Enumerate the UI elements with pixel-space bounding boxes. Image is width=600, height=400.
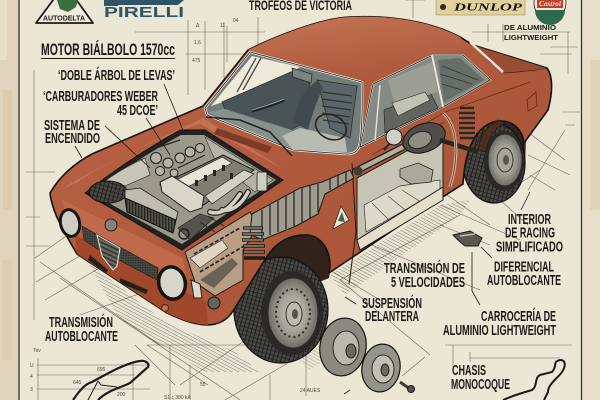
label: transmision 5 velocidades <box>384 259 465 291</box>
leader lines <box>75 84 530 394</box>
label: chasis <box>451 363 510 393</box>
label: interior: DE RACING <box>505 226 555 242</box>
small blueprint annotations: 04 <box>233 18 239 24</box>
label: motor heading: MOTOR BIÁLBOLO 1570cc <box>41 40 175 59</box>
label: carburadores: ‘CARBURADORES WEBER <box>43 89 158 105</box>
label: encendido: SISTEMA DE <box>44 118 100 134</box>
label: transmision 5 velocidades: 5 VELOCIDADES <box>391 275 465 291</box>
label: carroceria: CARROCERÍA DE <box>481 308 556 325</box>
cylinder head <box>160 155 254 206</box>
carburetors <box>150 144 204 177</box>
small blueprint annotations: 11 <box>220 23 225 29</box>
right inner wall <box>205 137 273 192</box>
hood panel highlight <box>60 118 285 190</box>
transmission and driveshaft <box>250 108 478 240</box>
label: encendido <box>44 118 100 147</box>
top right note <box>504 23 558 42</box>
floor tub <box>364 180 440 232</box>
door arm rest <box>252 100 284 111</box>
label: interior <box>496 212 563 256</box>
small blueprint annotations: 200 <box>117 392 126 398</box>
rear coil spring <box>459 108 475 138</box>
grille mesh <box>82 226 158 280</box>
small blueprint annotations: Δ <box>196 23 200 29</box>
label: transmision autoblocante: AUTOBLOCANTE <box>45 329 118 345</box>
stained left margin <box>0 0 18 400</box>
rear-view mirror <box>292 68 312 83</box>
cowl vents <box>214 128 272 153</box>
lower block details <box>178 214 214 240</box>
interior through glass <box>384 92 438 133</box>
door seam <box>349 163 356 284</box>
door panel <box>222 71 310 130</box>
small blueprint annotations <box>30 18 321 400</box>
bolt <box>400 382 414 392</box>
door mirror <box>384 129 402 150</box>
propshaft <box>354 147 403 172</box>
bumper slots <box>88 255 108 273</box>
label: transmision 5 velocidades: TRANSMISIÓN DE <box>384 259 465 277</box>
small differential part <box>453 231 482 246</box>
label: transmision autoblocante <box>45 313 118 345</box>
small blueprint annotations: 3 <box>30 387 33 393</box>
left headlight <box>56 206 84 240</box>
oil filter <box>257 172 267 191</box>
brake disc 1 <box>315 314 371 380</box>
top right note: DE ALUMINIO <box>504 23 556 32</box>
side windows <box>360 55 490 147</box>
wiper <box>206 117 292 156</box>
Castrol logo: Castrol <box>539 0 561 8</box>
front lip highlight <box>62 200 187 280</box>
floor perspective grid <box>35 130 570 400</box>
label: diferencial <box>487 260 561 289</box>
AUTODELTA logo <box>36 0 93 23</box>
wing badge <box>333 206 349 229</box>
label: chasis: MONOCOQUE <box>451 377 510 393</box>
front wheel with arch <box>234 235 330 363</box>
gearbox <box>250 170 354 240</box>
AUTODELTA logo: AUTODELTA <box>43 14 86 22</box>
rear window strip <box>470 42 503 72</box>
top right note: LIGHTWEIGHT <box>504 33 558 42</box>
lower valance <box>75 235 208 325</box>
small blueprint annotations: U <box>30 363 34 369</box>
label: chasis: CHASIS <box>452 363 486 379</box>
rear wheel <box>463 120 526 203</box>
ground hatch shadow <box>88 200 470 372</box>
rear arch scribble <box>470 120 505 160</box>
trunk deck <box>473 45 547 73</box>
floor <box>282 128 347 152</box>
brake disc 2 <box>358 341 404 395</box>
windshield and cockpit <box>205 52 362 156</box>
rear fuel flap <box>527 92 537 111</box>
label: diferencial: DIFERENCIAL <box>494 260 554 276</box>
clear glass upper left <box>211 56 300 106</box>
front coil spring <box>242 228 265 258</box>
label: suspension: SUSPENSIÓN <box>362 294 422 312</box>
DUNLOP logo <box>436 0 525 15</box>
car body <box>50 17 552 325</box>
label: carroceria <box>443 308 556 339</box>
cam cover end <box>160 176 204 212</box>
label: carburadores: 45 DCOE’ <box>117 103 158 119</box>
dash top <box>208 109 293 150</box>
front fender cutaway with mechanicals <box>185 212 258 309</box>
small blueprint annotations: Tov <box>33 348 41 354</box>
stained right margin <box>582 0 600 400</box>
exhaust manifold <box>210 192 248 213</box>
DUNLOP logo: DUNLOP <box>452 2 523 14</box>
label: carburadores <box>43 89 158 119</box>
indicator <box>191 280 202 298</box>
front end: grille and headlights <box>56 206 202 312</box>
label: transmision autoblocante: TRANSMISIÓN <box>49 313 113 331</box>
label: interior: SIMPLIFICADO <box>496 240 563 256</box>
seat <box>317 80 357 138</box>
steering wheel <box>311 109 351 145</box>
radiator <box>125 188 178 220</box>
body crease line <box>360 82 530 168</box>
Castrol logo <box>534 0 566 25</box>
track map right <box>503 360 565 400</box>
label: suspension <box>362 294 422 325</box>
body shell <box>50 17 552 325</box>
right headlight <box>154 262 190 304</box>
label: interior: INTERIOR <box>508 212 551 228</box>
label: motor heading <box>41 40 175 59</box>
small blueprint annotations: 24 AUES <box>300 388 321 394</box>
PIRELLI logo: PIRELLI <box>104 5 184 21</box>
label: suspension: DELANTERA <box>365 309 419 325</box>
rear cut frame <box>443 113 456 187</box>
sill strip <box>357 187 443 250</box>
small blueprint annotations: 4 <box>30 374 33 380</box>
a-pillar strut <box>237 58 261 92</box>
inner wheel wall <box>93 158 150 196</box>
small blueprint annotations: 55 <box>200 382 206 388</box>
label: doble arbol: ‘DOBLE ÁRBOL DE LEVAS’ <box>58 67 175 84</box>
label: encendido: ENCENDIDO <box>45 131 100 147</box>
hood emblem <box>105 219 117 231</box>
shield grille <box>97 235 120 270</box>
spare tyre <box>89 181 127 203</box>
small blueprint annotations: 1,6 <box>194 40 201 46</box>
engine bay <box>85 130 283 250</box>
track map left <box>73 361 149 400</box>
battery box <box>400 163 433 184</box>
small blueprint annotations: 695 <box>97 367 106 373</box>
small blueprint annotations: 645 <box>73 380 82 386</box>
differential <box>399 117 449 159</box>
PIRELLI logo <box>104 0 184 21</box>
brake caliper <box>208 297 220 309</box>
roof panel <box>248 17 470 82</box>
small blueprint annotations: 475 <box>192 58 201 64</box>
cutaway floor pan <box>357 130 443 250</box>
